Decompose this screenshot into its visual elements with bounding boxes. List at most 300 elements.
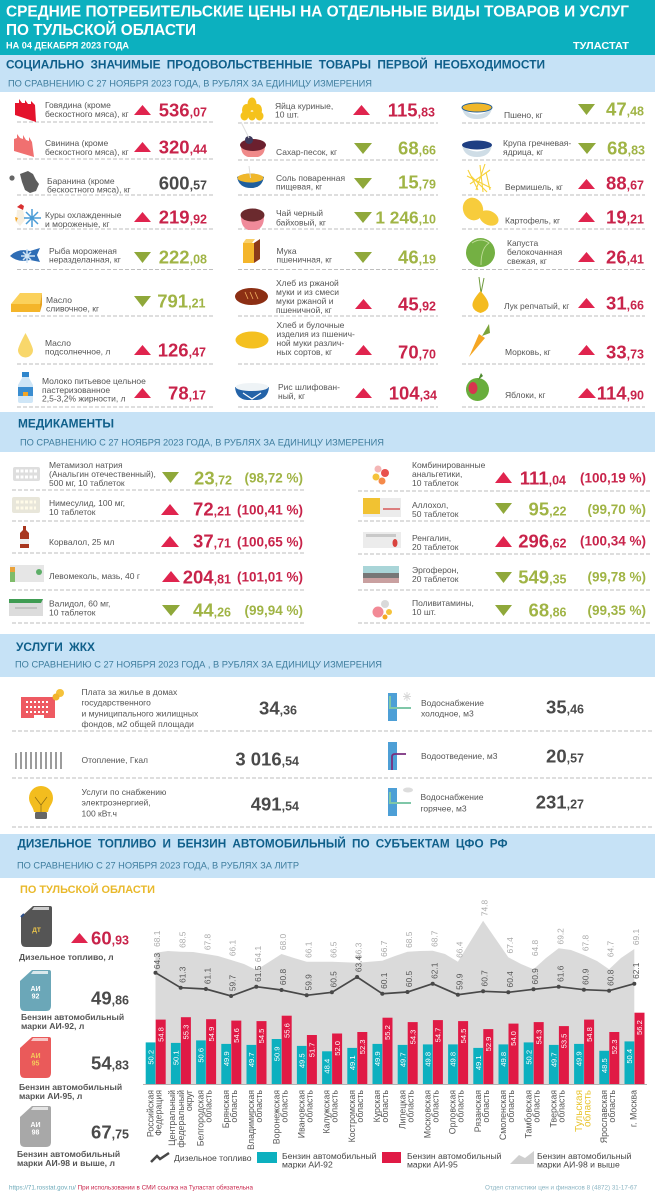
arrow down (354, 212, 372, 223)
subheading: ПО СРАВНЕНИЮ С 27 НОЯБРЯ 2023 ГОДА, В РУБЛЯХ ЗА ЛИТР (17, 860, 299, 870)
icon: radiator (16, 752, 61, 769)
label: 10 шт. (275, 110, 299, 120)
price: 72,21 (193, 498, 231, 520)
icon: mutton (20, 171, 39, 193)
arrow up (355, 388, 372, 398)
legend: AI-92: марки АИ-92 (282, 1160, 333, 1170)
title: СРЕДНИЕ ПОТРЕБИТЕЛЬСКИЕ ЦЕНЫ НА ОТДЕЛЬНЫЕ ВИДЫ ТОВАРОВ И УСЛУГ (6, 4, 629, 20)
item: potato (460, 195, 644, 229)
values: diesel: 59.9 (303, 974, 313, 990)
icon: pipe (388, 692, 411, 721)
label: Водоснабжение (420, 792, 483, 802)
label: Корвалол, 25 мл (49, 537, 114, 547)
arrow up (578, 298, 595, 308)
arrow up (578, 212, 595, 222)
price: 3 016,54 (235, 748, 299, 770)
values: AI-98: 68.0 (278, 934, 288, 950)
medicine: allochol (363, 498, 646, 520)
price: 31,66 (606, 292, 644, 314)
region labels: область (582, 1090, 594, 1127)
region labels: г. Москва (628, 1090, 638, 1127)
region labels: Владимирская (246, 1090, 256, 1150)
values: AI-98: 68.7 (429, 930, 439, 947)
region labels: область (405, 1090, 415, 1123)
arrow down (578, 143, 596, 154)
icon: carrot (469, 324, 490, 357)
label: муки ржаной и (276, 296, 334, 306)
bars: AI-95 (156, 1013, 644, 1084)
values: AI-98: 68.5 (404, 931, 414, 948)
values: AI-92 bars: 49.9 (575, 1051, 584, 1066)
label: Валидол, 60 мг, (49, 598, 110, 608)
subheading: Tula region: ПО ТУЛЬСКОЙ ОБЛАСТИ (20, 883, 155, 896)
price: 111,04 (520, 468, 566, 488)
label: ных сортов, кг (276, 347, 332, 357)
region labels: область (279, 1090, 289, 1123)
arrow down (134, 252, 151, 263)
item: chicken (15, 204, 207, 229)
region labels: Калужская (322, 1090, 332, 1134)
icon: canister: АИ (30, 1053, 41, 1060)
label: пшеничная, кг (276, 255, 332, 265)
arrow up (578, 252, 595, 262)
region labels: область (254, 1090, 264, 1123)
arrow up (355, 299, 372, 309)
medicine: nimesulide (12, 497, 303, 520)
arrow down (495, 503, 512, 514)
icon: ergoferon box (363, 566, 399, 583)
medicine: corvalol (20, 526, 303, 552)
price: 296,62 (518, 530, 567, 552)
values: AI-95 bars: 55.3 (182, 1025, 191, 1039)
price: 47,48 (606, 98, 644, 120)
arrow down (354, 143, 372, 154)
icon: salt bowl (237, 166, 264, 188)
price: 104,34 (389, 382, 437, 404)
values: AI-92 bars: 48.4 (323, 1059, 332, 1074)
values: AI-92 bars: 49.7 (247, 1052, 256, 1067)
icon: chicken (15, 204, 41, 227)
values: diesel: 62.1 (429, 962, 439, 979)
values: AI-95 bars: 51.7 (308, 1042, 317, 1057)
price: 600,57 (159, 172, 207, 194)
percent: (99,35 %) (587, 603, 646, 618)
label: Чай черный (276, 208, 323, 218)
icon: canister: 98 (32, 1130, 39, 1136)
arrow up (578, 179, 595, 189)
item: mutton (9, 171, 207, 194)
section header: utilities (0, 634, 655, 677)
values: diesel: 60.9 (580, 968, 590, 985)
price: 68,83 (607, 138, 645, 158)
utility: hot water (388, 788, 584, 816)
percent: (98,72 %) (244, 470, 303, 486)
label: свежая, кг (507, 256, 547, 266)
item: rye bread (235, 278, 436, 315)
label: государственного (82, 698, 151, 708)
arrow up (161, 536, 179, 547)
item: onion (472, 277, 644, 314)
values: AI-95 bars: 52.0 (333, 1041, 342, 1056)
dashed dividers (17, 122, 645, 407)
label: Бензин автомобильный (19, 1082, 122, 1092)
fuel: diesel (19, 906, 129, 962)
region labels: Центральный (167, 1090, 177, 1146)
icon: oil drop (18, 333, 33, 358)
label: подсолнечное, л (45, 347, 110, 357)
arrow up (134, 345, 151, 355)
icon: fish (10, 248, 40, 263)
values: AI-95 bars: 54.3 (534, 1030, 543, 1044)
icon: blister (13, 467, 40, 481)
region labels: область (380, 1090, 390, 1123)
values: AI-95 bars: 54.7 (434, 1028, 443, 1042)
label: марки АИ-95, л (19, 1091, 82, 1101)
heading: ДИЗЕЛЬНОЕ ТОПЛИВО И БЕНЗИН АВТОМОБИЛЬНЫЙ ПО СУБЪЕКТАМ ЦФО РФ (18, 836, 508, 850)
fuel: AI-95 (19, 1037, 129, 1101)
values: AI-98: 74.8 (480, 900, 490, 916)
price: 68,86 (529, 600, 567, 620)
arrow down (495, 572, 512, 583)
label: Свинина (кроме (45, 138, 108, 148)
fuel: AI-98 (17, 1106, 129, 1168)
utility: electricity (29, 786, 299, 819)
values: AI-95 bars: 54.0 (509, 1031, 518, 1046)
percent: (99,94 %) (244, 603, 303, 618)
label: Крупа гречневая- (503, 138, 571, 148)
region labels: Брянская (221, 1090, 231, 1128)
arrow down (354, 252, 372, 263)
label: электроэнергией, (82, 798, 151, 808)
percent: (100,34 %) (580, 534, 646, 548)
label: 10 шт. (412, 607, 436, 617)
values: diesel: 59.9 (454, 973, 464, 990)
label: Эргоферон, (412, 565, 459, 575)
values: diesel: 60.4 (505, 971, 515, 987)
price: 115,83 (388, 100, 435, 120)
label: Поливитамины, (412, 598, 474, 608)
label: Морковь, кг (505, 347, 551, 357)
medicine: levomekol (10, 565, 303, 588)
legend: AI-92 (257, 1151, 377, 1170)
icon: pills (372, 466, 389, 484)
values: diesel: 62.1 (631, 962, 641, 979)
values: AI-92 bars: 50.2 (146, 1050, 155, 1065)
label: Бензин автомобильный (17, 1149, 120, 1159)
price: 67,75 (91, 1122, 129, 1142)
line: diesel (154, 971, 636, 998)
values: AI-98: 66.4 (454, 941, 464, 958)
arrow down (354, 178, 372, 189)
values: AI-98: 67.8 (202, 934, 212, 950)
label: 10 таблеток (49, 608, 96, 618)
icon: canister (20, 1037, 51, 1078)
label: Нимесулид, 100 мг, (49, 498, 125, 508)
percent: (101,01 %) (237, 570, 303, 584)
icon: milk bottle (18, 372, 33, 403)
values: AI-92 bars: 50.4 (625, 1049, 634, 1064)
utility: heating (16, 748, 299, 770)
region labels: Ярославская (599, 1090, 609, 1143)
region labels: область (456, 1090, 466, 1123)
icon: rengalin box (363, 532, 401, 548)
price: 1 246,10 (375, 208, 436, 228)
baseline (143, 1083, 647, 1085)
price: 88,67 (606, 172, 644, 194)
item: sugar (240, 122, 436, 158)
region labels: область (229, 1090, 239, 1123)
arrow down (162, 605, 180, 616)
values: diesel: 60.1 (379, 972, 389, 989)
medicine: multivitamins (372, 598, 646, 620)
price: 26,41 (606, 246, 644, 268)
values: AI-95 bars (156, 1020, 644, 1057)
icon: blister (12, 497, 40, 513)
icon: onion (472, 277, 489, 313)
values: AI-92 bars: 49.1 (474, 1055, 483, 1070)
icon: canister (20, 1106, 51, 1147)
icon: white bread (236, 332, 268, 348)
values: AI-95 bars: 56.2 (635, 1020, 644, 1035)
values: AI-95 bars: 53.5 (560, 1034, 569, 1048)
values: diesel: 60.8 (606, 969, 616, 986)
arrow up (134, 142, 151, 152)
values: diesel: 61.5 (253, 965, 263, 982)
icon: butter (11, 293, 42, 312)
values: diesel: 60.7 (480, 970, 490, 986)
label: Дизельное топливо, л (19, 952, 114, 962)
label: Капуста (507, 238, 538, 248)
dashed dividers (12, 490, 652, 623)
values: AI-92 bars: 49.8 (424, 1052, 432, 1067)
label: пшеничной, кг (276, 305, 332, 315)
footer: contact: Отдел статистики цен и финансов 8 (4872) 31-17-67 (485, 1184, 637, 1192)
values: diesel: 60.5 (404, 971, 414, 987)
price: 45,92 (398, 294, 436, 314)
icon: canister: АИ (30, 1122, 41, 1129)
icon: bottle (20, 526, 29, 548)
values: AI-92 bars: 48.5 (600, 1058, 609, 1073)
price: 791,21 (157, 290, 206, 312)
region labels: Смоленская (498, 1090, 508, 1140)
bars: AI-92 (146, 1039, 634, 1084)
values: AI-98: 66.1 (228, 940, 238, 956)
arrow up (578, 345, 595, 355)
values: AI-92 bars: 49.1 (348, 1055, 357, 1070)
dashed dividers (12, 731, 652, 827)
footer: source: https://71.rosstat.gov.ru/ При использовании в СМИ ссылка на Туластат обязательна (9, 1184, 253, 1192)
item: pork (14, 134, 207, 158)
values: AI-98: 69.2 (555, 928, 565, 944)
legend: AI-98: Бензин автомобильный (537, 1151, 631, 1161)
label: байховый, кг (276, 218, 326, 228)
values: AI-98: 64.7 (606, 941, 616, 957)
icon: light bulb (29, 786, 53, 819)
price: 54,83 (91, 1052, 129, 1074)
icon: rice bowl (235, 383, 269, 400)
values: AI-92 bars: 50.2 (524, 1050, 533, 1065)
item: white bread (236, 320, 436, 362)
item: beef (15, 99, 207, 122)
legend: AI-95 (382, 1151, 502, 1170)
legend: AI-98 (510, 1151, 632, 1170)
price: 35,46 (546, 696, 584, 718)
region labels: Тамбовская (523, 1090, 533, 1138)
icon: canister: АИ (30, 986, 41, 993)
label: Рис шлифован- (278, 382, 340, 392)
price: 37,71 (193, 530, 231, 552)
label: Куры охлажденные (45, 210, 121, 220)
region labels: Липецкая (397, 1090, 407, 1129)
percent: (100,41 %) (237, 502, 303, 518)
legend: AI-95: марки АИ-95 (407, 1160, 458, 1170)
label: Аллохол, (412, 500, 448, 510)
label: Отопление, Гкал (82, 755, 148, 765)
values: AI-95 bars: 54.6 (232, 1028, 241, 1043)
icon: eggs (240, 98, 264, 120)
values: AI-98: 66.1 (303, 941, 313, 958)
label: (Анальгин отечественный), (49, 469, 156, 479)
label: Масло (45, 338, 71, 348)
region labels: федеральный (176, 1090, 186, 1148)
region labels: Орловская (448, 1090, 458, 1134)
icon: beef (15, 99, 36, 122)
label: Водоснабжение (421, 698, 484, 708)
chart: fuel prices by region (143, 900, 647, 1150)
region labels: Российская (145, 1090, 155, 1137)
utility: cold water (388, 692, 584, 721)
label: ной муки различ- (276, 338, 344, 348)
item: millet (462, 98, 644, 120)
label: Яблоки, кг (505, 390, 545, 400)
label: Левомеколь, мазь, 40 г (49, 571, 140, 581)
price: 114,90 (597, 382, 644, 404)
arrow up (134, 105, 151, 115)
percent: (99,78 %) (587, 570, 646, 584)
medicine: ergoferon (363, 565, 646, 588)
subheading: ПО СРАВНЕНИЮ С 27 НОЯБРЯ 2023 ГОДА , В РУБЛЯХ ЗА ЕДИНИЦУ ИЗМЕРЕНИЯ (15, 658, 382, 670)
item: eggs (240, 98, 435, 120)
values: AI-92 bars: 50.9 (272, 1046, 281, 1061)
values: AI-95 bars: 54.5 (459, 1029, 468, 1043)
label: муки и из смеси (276, 287, 339, 297)
values: AI-98: 66.7 (379, 940, 389, 957)
region labels: область (481, 1090, 491, 1123)
price: 68,66 (398, 138, 436, 158)
legend: AI-95: Бензин автомобильный (407, 1151, 501, 1161)
arrow up (578, 388, 596, 398)
heading: УСЛУГИ ЖКХ (16, 640, 95, 654)
values: AI-98: 67.8 (580, 935, 590, 951)
label: Говядина (кроме (45, 100, 111, 110)
values: AI-92 bars: 50.6 (197, 1048, 206, 1063)
label: Вермишель, кг (505, 182, 563, 192)
label: марки АИ-92, л (21, 1021, 84, 1031)
label: холодное, м3 (421, 708, 474, 718)
medicine: combined analgesics (372, 460, 646, 488)
item: cabbage (466, 238, 644, 268)
utility: drainage (388, 742, 584, 770)
values: diesel: 61.3 (177, 966, 187, 983)
values: AI-95 bars: 55.2 (383, 1025, 392, 1040)
icon: tea cup (240, 208, 264, 230)
icon: cabbage (466, 238, 495, 267)
label: 2,5-3,2% жирности, л (42, 394, 126, 404)
price: 15,79 (398, 172, 436, 192)
values: diesel: 60.9 (530, 968, 540, 984)
values: AI-95 bars: 54.5 (257, 1029, 266, 1043)
subheading: ПО СРАВНЕНИЮ С 27 НОЯБРЯ 2023 ГОДА, В РУБЛЯХ ЗА ЕДИНИЦУ ИЗМЕРЕНИЯ (8, 78, 372, 88)
values: AI-92 bars: 49.7 (398, 1052, 407, 1067)
price: 70,70 (398, 342, 436, 362)
icon: rye bread (235, 288, 268, 305)
icon: sugar cup (240, 122, 266, 157)
price: 219,92 (159, 206, 207, 228)
price: 60,93 (91, 928, 129, 948)
arrow down (134, 296, 151, 307)
region labels: область (556, 1090, 566, 1123)
icon: buckwheat bowl (462, 140, 492, 157)
legend (151, 1151, 632, 1170)
label: Сахар-песок, кг (276, 147, 337, 157)
icon: canister (20, 970, 51, 1011)
label: Хлеб из ржаной (276, 278, 339, 288)
values: AI-92 bars: 49.8 (449, 1052, 458, 1067)
values: AI-98 (152, 900, 641, 962)
label: пастеризованное (42, 385, 110, 395)
heading: МЕДИКАМЕНТЫ (18, 416, 114, 430)
label: фондов, м2 общей площади (82, 719, 194, 729)
label: Молоко питьевое цельное (42, 376, 146, 386)
price: 34,36 (259, 698, 297, 718)
region labels: Воронежская (271, 1090, 281, 1144)
region labels: область (355, 1090, 365, 1123)
fuel: AI-92 (20, 970, 129, 1031)
arrow up (71, 933, 88, 943)
label: 10 таблеток (412, 478, 459, 488)
price: 19,21 (606, 206, 644, 228)
price: 49,86 (91, 988, 129, 1008)
item: carrot (469, 324, 644, 362)
label: марки АИ-98 и выше, л (17, 1158, 115, 1168)
label: сливочное, кг (46, 304, 99, 314)
item: tea (240, 208, 436, 230)
item: sunflower oil (18, 333, 206, 360)
values: AI-95 bars: 54.9 (207, 1027, 216, 1041)
section header: medicines (0, 412, 655, 452)
label: и муниципального жилищных (82, 708, 199, 718)
label: неразделанная, кг (49, 255, 121, 265)
icon: vitamins (372, 600, 392, 620)
item: salt (237, 166, 436, 192)
label: и мороженые, кг (45, 219, 110, 229)
region labels: область (204, 1090, 214, 1123)
values: AI-98: 68.5 (177, 931, 187, 948)
values: AI-92 bars (146, 1046, 634, 1074)
label: 10 таблеток (49, 507, 96, 517)
section header: fuel (0, 834, 655, 878)
label: 50 таблеток (412, 509, 459, 519)
label: Мука (276, 246, 297, 256)
region labels: Курская (372, 1090, 382, 1122)
region labels (145, 1090, 638, 1150)
label: 20 таблеток (412, 542, 459, 552)
item: milk (18, 372, 206, 404)
icon: pipe (388, 788, 413, 816)
title second line: ПО ТУЛЬСКОЙ ОБЛАСТИ (6, 20, 196, 39)
price: 126,47 (158, 340, 206, 360)
label: Яйца куриные, (275, 101, 333, 111)
